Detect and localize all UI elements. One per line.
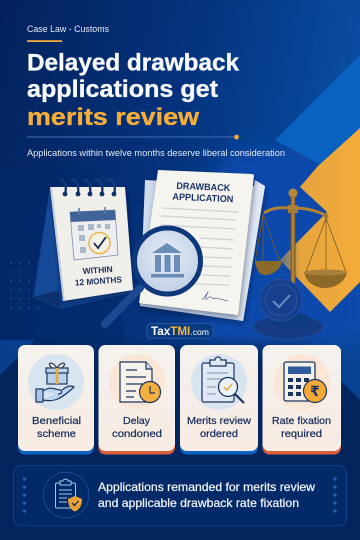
- left dots: [23, 477, 26, 513]
- header block: [27, 24, 285, 159]
- icon: calculator with rupee: ₹: [310, 384, 320, 400]
- illustration: [33, 170, 347, 339]
- label: ordered: [200, 428, 238, 440]
- icon: desk calendar: [33, 180, 136, 309]
- icon: check seal: [260, 279, 302, 321]
- label: Delay: [123, 415, 151, 427]
- panel: Delay condoned: [98, 345, 175, 454]
- signature: [202, 292, 228, 301]
- label: scheme: [37, 428, 76, 440]
- title: merits review: [27, 104, 199, 131]
- panel: Beneficial scheme: [18, 345, 94, 454]
- label: [187, 415, 251, 440]
- panel: Rate fixation required: [262, 345, 341, 454]
- document lines: [160, 208, 238, 285]
- orange diamond shape: [280, 128, 360, 312]
- title divider: [27, 135, 239, 139]
- calendar text: 12 MONTHS: [75, 274, 123, 288]
- icon: clipboard with shield: [43, 472, 89, 518]
- label: condoned: [112, 428, 162, 440]
- label: [32, 415, 81, 440]
- subtitle: Applications within twelve months deserve liberal consideration: [27, 148, 285, 159]
- panel: Merits review ordered: [180, 345, 258, 454]
- inner calendar icon: [70, 207, 118, 260]
- label: Merits review: [187, 415, 251, 427]
- document heading: DRAWBACK: [176, 181, 231, 194]
- title: [27, 50, 240, 131]
- icon: application document: [139, 170, 265, 321]
- kicker underline: [27, 40, 62, 42]
- banner text: and applicable drawback rate fixation: [98, 496, 299, 510]
- document heading: APPLICATION: [172, 192, 234, 205]
- calendar text: WITHIN: [82, 264, 113, 276]
- icon: magnifier with bank: [105, 228, 200, 324]
- icon: document with clock: [109, 354, 165, 410]
- logo badge: [147, 324, 213, 338]
- document heading: [172, 181, 234, 205]
- label: required: [281, 428, 322, 440]
- panel: conclusion banner: [14, 466, 346, 526]
- title: Delayed drawback: [27, 50, 240, 77]
- label: [272, 415, 331, 440]
- label: Beneficial: [32, 415, 81, 427]
- icon: clipboard with magnifier: [191, 354, 247, 410]
- icon: gift on hand: [28, 354, 84, 410]
- title: applications get: [27, 76, 218, 103]
- banner text: [98, 480, 315, 510]
- calendar rings: [60, 180, 115, 194]
- label: Rate fixation: [272, 415, 331, 427]
- banner text: Applications remanded for merits review: [98, 480, 315, 494]
- calendar text: [74, 263, 123, 288]
- right dots: [333, 477, 337, 513]
- kicker: Case Law - Customs: [27, 24, 109, 34]
- icon: scales of justice: [253, 188, 347, 339]
- logo badge: TaxTMI.com: [151, 326, 209, 338]
- label: [112, 415, 162, 440]
